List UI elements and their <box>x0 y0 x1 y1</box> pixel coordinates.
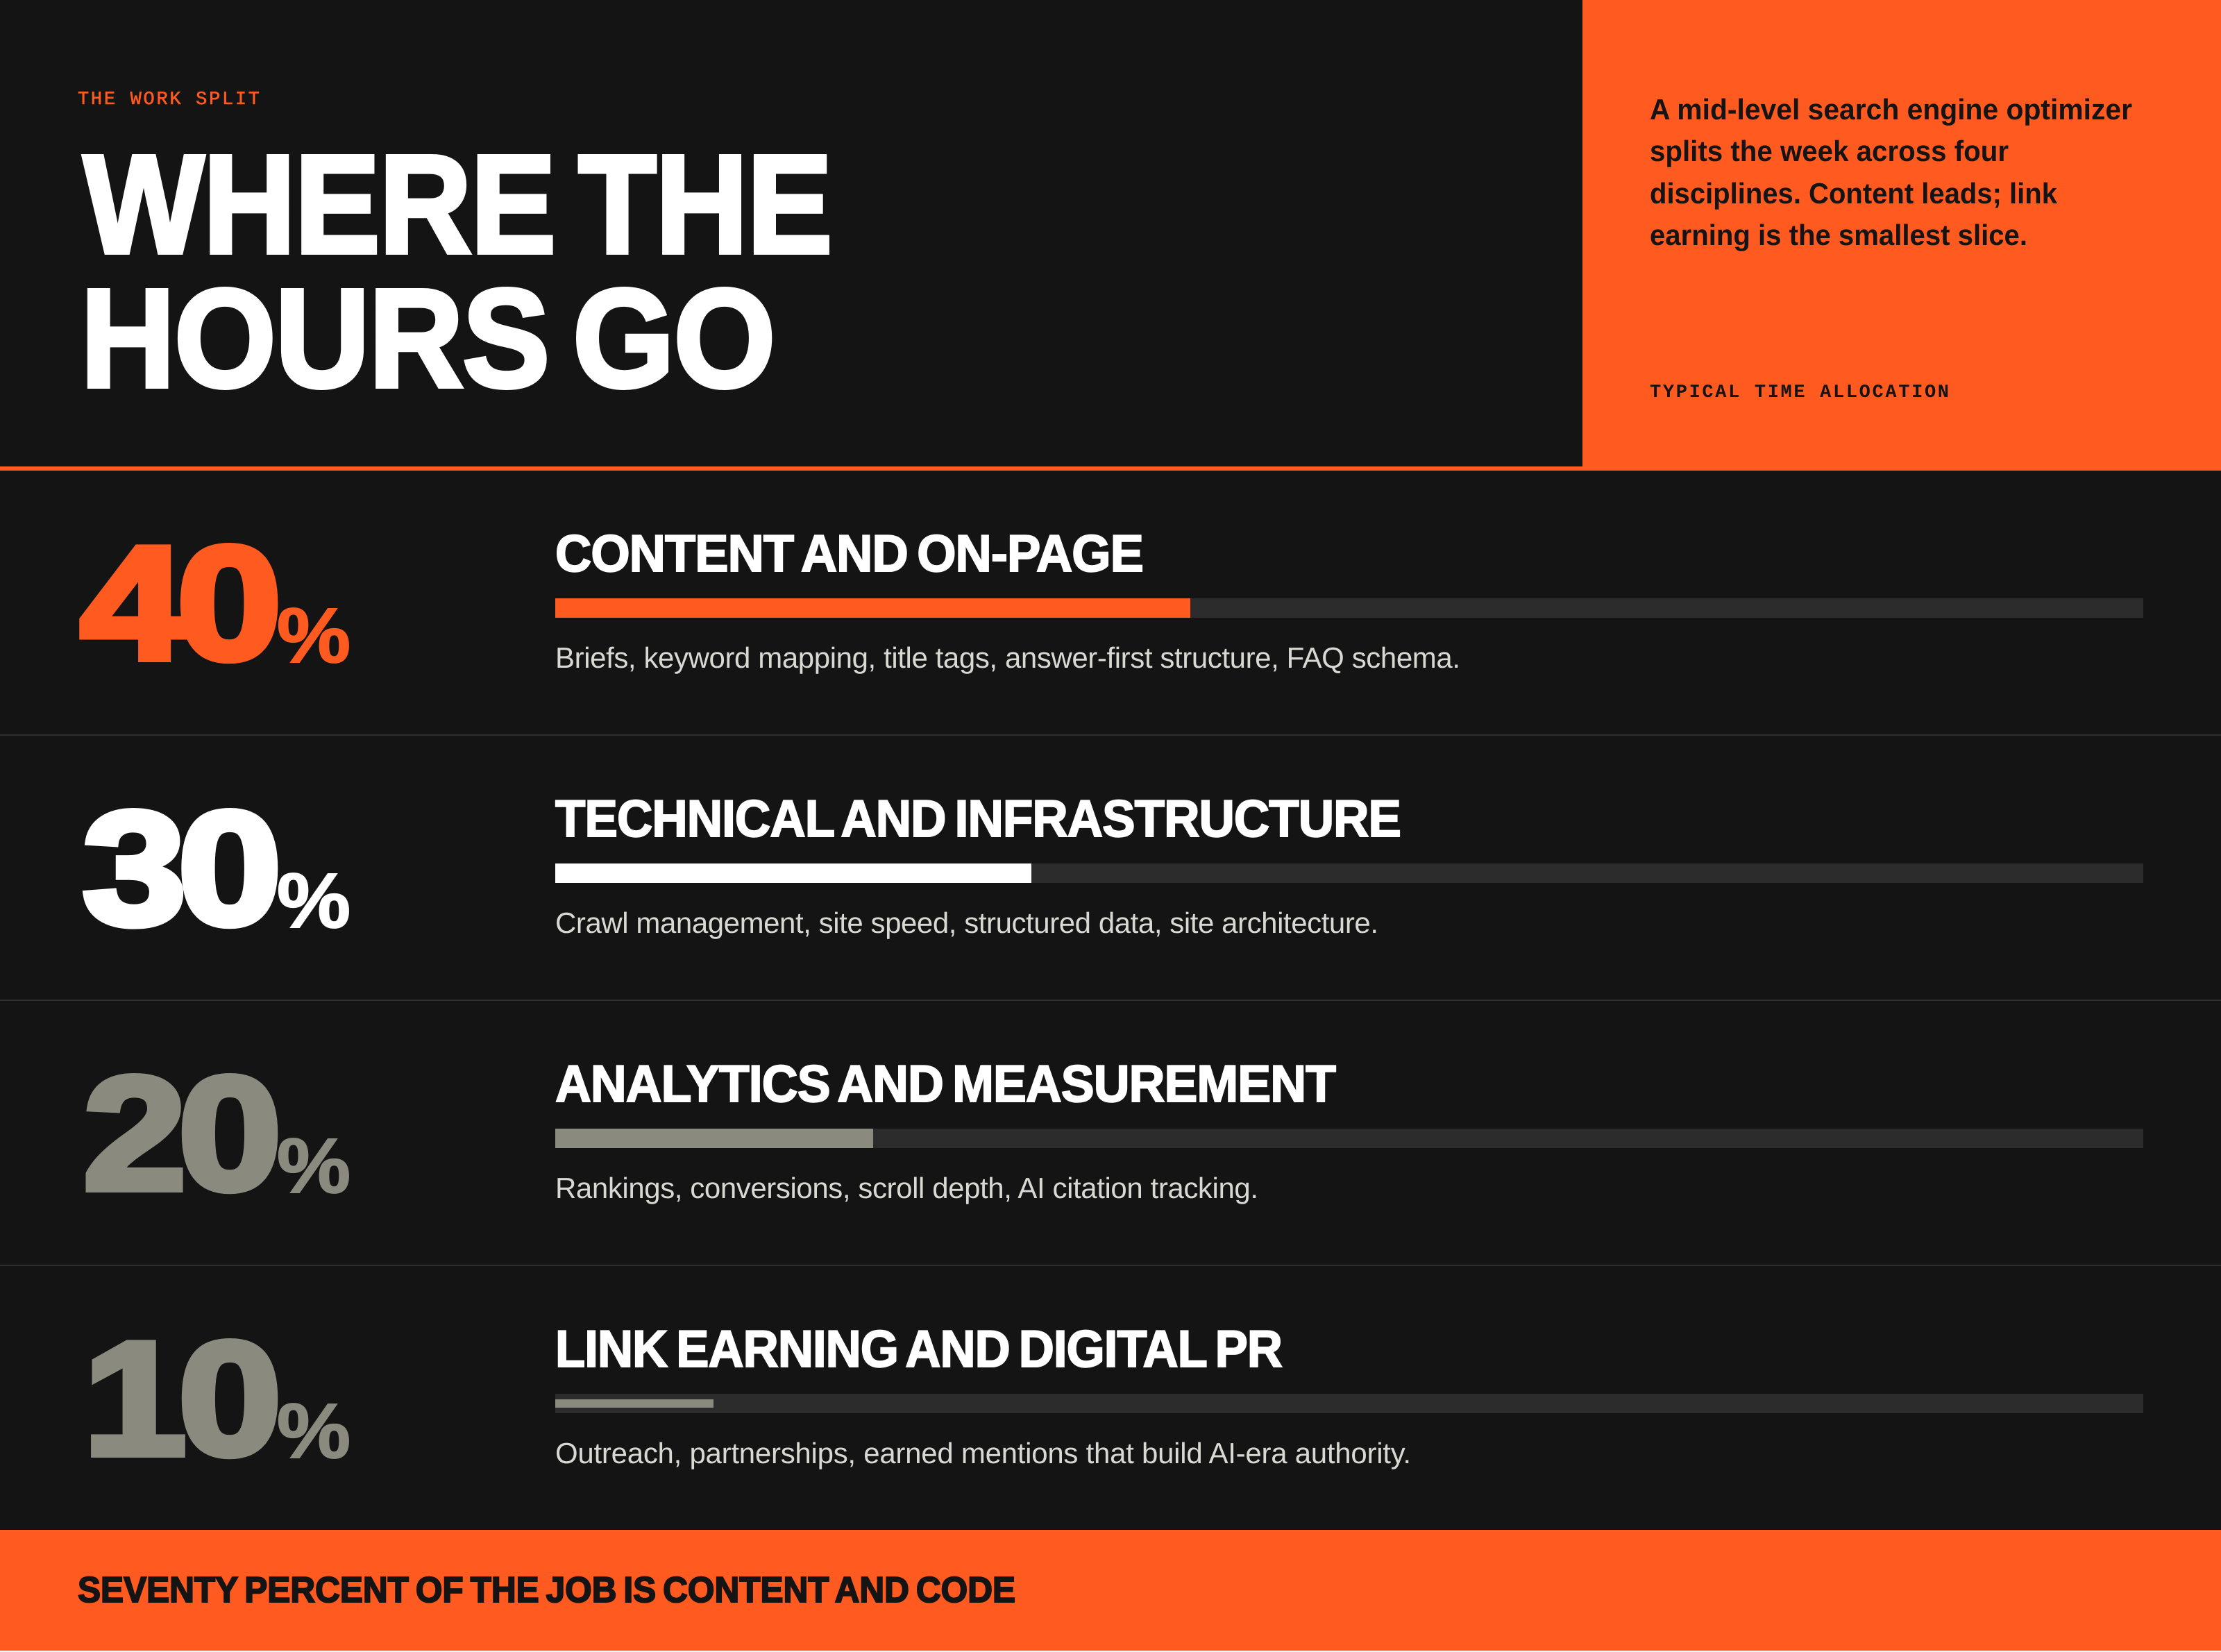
row: 10 percent link earning and digital PR <box>83 1309 2143 1489</box>
stat: 20 percent: 20 <box>83 1044 274 1224</box>
intro text: splits the week across four <box>1650 135 2009 167</box>
stat: 20 percent: % <box>277 1122 351 1209</box>
stat: 40 percent: 40 <box>81 514 274 693</box>
heading: ANALYTICS AND MEASUREMENT <box>555 1054 1335 1113</box>
progress bar 10 <box>555 1394 2143 1413</box>
stat: 30 percent <box>83 779 351 959</box>
main title <box>81 126 831 416</box>
row: 20 percent analytics and measurement <box>83 1044 2143 1224</box>
intro text <box>1650 93 2132 251</box>
panel caption: TYPICAL TIME ALLOCATION <box>1650 382 1949 403</box>
heading: CONTENT AND ON-PAGE <box>555 524 1143 582</box>
footer statement: SEVENTY PERCENT OF THE JOB IS CONTENT AND CODE <box>78 1570 1015 1610</box>
stat: 10 percent <box>83 1309 351 1489</box>
stat: 40 percent <box>81 514 351 693</box>
stat: 10 percent: 10 <box>83 1309 274 1489</box>
stat: 30 percent: % <box>277 857 351 944</box>
panel: intro summary <box>1582 0 2221 471</box>
intro text: A mid-level search engine optimizer <box>1650 93 2132 126</box>
row: 30 percent technical and infrastructure <box>83 779 2143 959</box>
stat: 20 percent <box>83 1044 351 1224</box>
row: 40 percent content and on-page <box>81 514 2143 693</box>
intro text: disciplines. Content leads; link <box>1650 177 2058 210</box>
description: Rankings, conversions, scroll depth, AI citation tracking. <box>555 1172 1258 1204</box>
stat: 10 percent: % <box>277 1388 351 1474</box>
header panel: title <box>0 0 1582 471</box>
main title: HOURS GO <box>81 260 775 416</box>
description: Outreach, partnerships, earned mentions that build AI-era authority. <box>555 1437 1411 1469</box>
heading: TECHNICAL AND INFRASTRUCTURE <box>555 789 1401 848</box>
progress bar 20 <box>555 1129 2143 1148</box>
heading: LINK EARNING AND DIGITAL PR <box>555 1320 1282 1378</box>
description: Briefs, keyword mapping, title tags, answer-first structure, FAQ schema. <box>555 641 1460 674</box>
description: Crawl management, site speed, structured data, site architecture. <box>555 907 1378 939</box>
eyebrow label: THE WORK SPLIT <box>78 90 260 110</box>
progress bar 30 <box>555 863 2143 883</box>
stat: 30 percent: 30 <box>83 779 274 959</box>
main title: WHERE THE <box>83 126 831 283</box>
stat: 40 percent: % <box>277 592 351 679</box>
progress bar 40 <box>555 598 2143 618</box>
intro text: earning is the smallest slice. <box>1650 219 2027 251</box>
footer banner <box>0 1530 2221 1651</box>
